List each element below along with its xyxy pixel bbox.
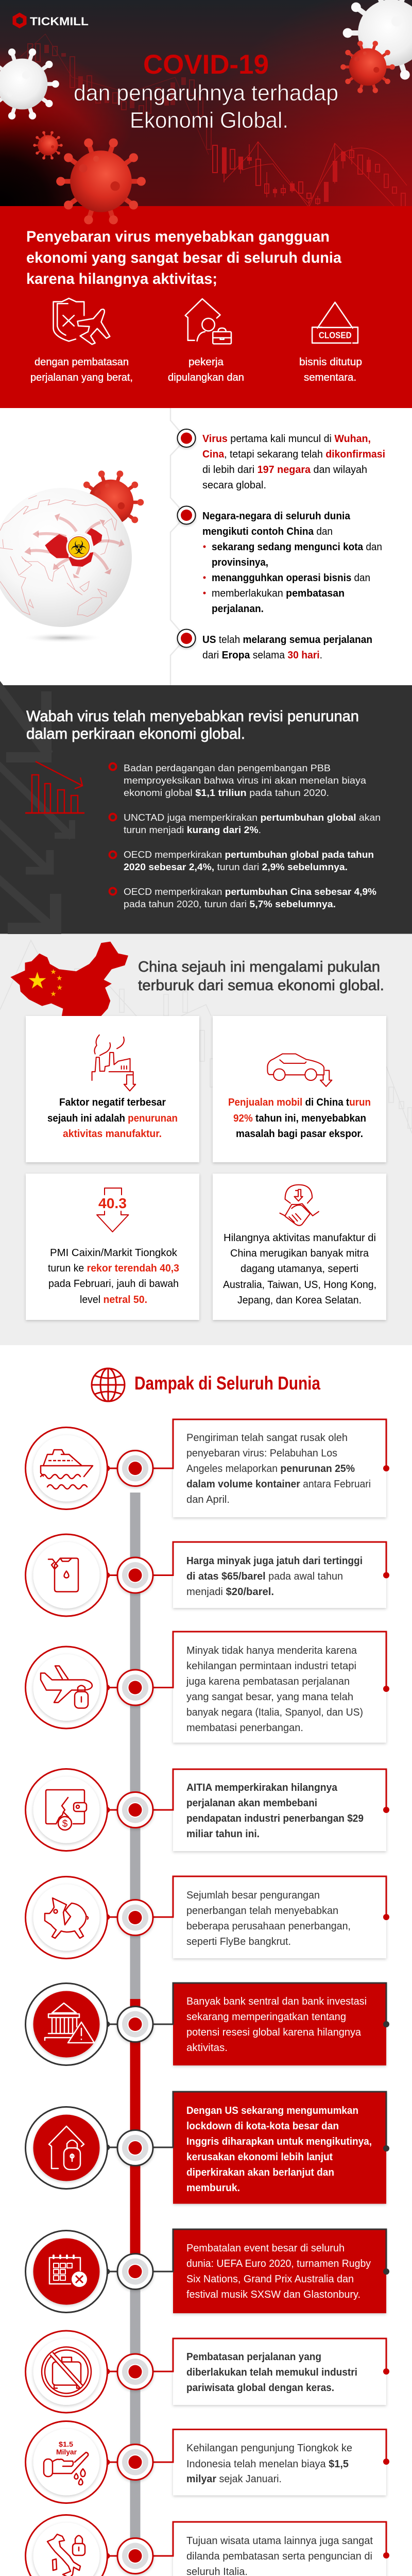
icon: car — [267, 1054, 332, 1087]
icon: hand and money drops: $1.5 — [59, 2440, 73, 2448]
text: airline revenue: miliar tahun ini. — [186, 1828, 260, 1840]
icon: plane and lock — [41, 1666, 92, 1708]
heading: forecast — [26, 708, 359, 742]
logo: Tickmill: TICKMILL — [30, 15, 89, 28]
caption: travel: dengan pembatasan — [35, 357, 129, 368]
text: countries follow China — [202, 511, 382, 615]
bullet: UN trade: memproyeksikan bahwa virus ini akan menelan biaya — [124, 775, 367, 786]
card: PMI: PMI Caixin/Markit Tiongkok — [50, 1247, 178, 1259]
text: countries follow China: menangguhkan operasi bisnis dan — [212, 572, 370, 584]
bullet: OECD China: pada tahun 2020, turun dari 5,7% sebelumnya. — [124, 899, 336, 909]
text: tourism: pariwisata global dengan keras. — [186, 2382, 334, 2394]
panel: red intro — [0, 143, 412, 408]
text: shipping: dalam volume kontainer antara Februari — [186, 1479, 371, 1490]
text: cancelled events: Pembatalan event besar di seluruh — [186, 2243, 345, 2254]
bullet marker 3 — [177, 630, 196, 647]
text: Indonesia visitors: milyar sejak Januari. — [186, 2473, 282, 2485]
timeline item: shipping — [26, 1419, 389, 1517]
icon: bank warning — [45, 2003, 94, 2043]
text: lockdown: kerusakan ekonomi lebih lanjut — [186, 2151, 333, 2163]
icon: handshake — [280, 1185, 319, 1226]
text: Italy — [186, 2535, 373, 2576]
bullet marker 2 — [177, 506, 196, 524]
text: countries follow China: memberlakukan pembatasan — [212, 588, 345, 599]
text: US ban — [202, 634, 372, 661]
text: oil price — [186, 1555, 363, 1598]
illustration: globe with virus — [0, 474, 141, 643]
text: tourism: diberlakukan telah memukul industri — [186, 2367, 357, 2378]
text: tourism — [186, 2351, 357, 2394]
heading: forecast: dalam perkiraan ekonomi global. — [26, 725, 245, 742]
icon: 40.3 down arrow — [97, 1188, 129, 1232]
title: COVID-19 — [143, 49, 269, 80]
panel: outbreak facts — [0, 408, 412, 685]
caption: travel: perjalanan yang berat, — [30, 372, 133, 383]
map: China flag — [10, 942, 128, 1016]
icon: hand and money drops — [44, 2440, 88, 2485]
text: lockdown: lockdown di kota-kota besar dan — [186, 2121, 339, 2132]
text: virus origin: Cina, tetapi sekarang telah dikonfirmasi — [202, 449, 385, 460]
panel: global impact timeline — [0, 1345, 412, 2576]
text: Indonesia visitors — [186, 2443, 352, 2485]
text: Indonesia visitors: Indonesia telah menelan biaya $1,5 — [186, 2459, 349, 2470]
text: virus origin — [202, 433, 385, 491]
text: countries follow China: provinsinya, — [212, 557, 268, 568]
heading: worldwide impact: Dampak di Seluruh Dunia — [134, 1372, 321, 1394]
icon: broken piggy bank — [45, 1898, 88, 1938]
card: car sales: 92% tahun ini, menyebabkan — [233, 1113, 366, 1124]
icon: calendar cancel — [49, 2256, 87, 2287]
text: recession warning: potensi resesi global karena hilangnya — [186, 2027, 362, 2038]
text: airline bankruptcy: Sejumlah besar pengurangan — [186, 1890, 320, 1901]
icon: closed sign: CLOSED — [319, 330, 352, 341]
chart: candlesticks right — [213, 142, 407, 216]
text: countries follow China: mengikuti contoh China dan — [202, 526, 333, 537]
caption: travel — [30, 357, 133, 383]
icon: globe — [92, 1368, 125, 1401]
text: cancelled events: festival musik SXSW dan Glastonbury. — [186, 2289, 360, 2300]
title: Ekonomi Global. — [130, 108, 288, 133]
bullet: UN trade: Badan perdagangan dan pengembangan PBB — [124, 763, 331, 773]
timeline item: tourism — [26, 2331, 389, 2413]
icon: small red virus — [35, 132, 61, 158]
icon: ship — [41, 1450, 93, 1489]
card: trade partners — [213, 1174, 386, 1320]
card: PMI — [26, 1174, 199, 1320]
text: oil price: di atas $65/barel pada awal tahun — [186, 1571, 343, 1582]
card: PMI: pada Februari, jauh di bawah — [48, 1278, 179, 1290]
text: recession warning: sekarang memperingatkan tentang — [186, 2011, 346, 2023]
timeline item: airline bankruptcy — [26, 1876, 389, 1959]
timeline item: Italy — [26, 2515, 389, 2576]
text: airline revenue — [186, 1782, 364, 1840]
bullet: UN trade — [109, 763, 367, 798]
heading: China: China sejauh ini mengalami pukulan — [138, 959, 380, 975]
icon: house lock — [49, 2126, 84, 2170]
text: countries follow China: Negara-negara di seluruh dunia — [202, 511, 351, 522]
text: airline revenue: AITIA memperkirakan hilangnya — [186, 1782, 338, 1793]
text: flight restrictions: kehilangan permintaan industri tetapi — [186, 1660, 356, 1672]
text: shipping: penyebaran virus: Pelabuhan Los — [186, 1448, 337, 1459]
icon: no luggage — [42, 2347, 91, 2397]
text: countries follow China: sekarang sedang mengunci kota dan — [212, 541, 382, 553]
icon: hand and money drops: Milyar — [56, 2448, 77, 2456]
card: trade partners: Jepang, dan Korea Selatan. — [237, 1295, 362, 1306]
text: shipping — [186, 1432, 371, 1505]
bullet: OECD global: 2020 sebesar 2,4%, turun dari 2,9% sebelumnya. — [124, 862, 348, 872]
icon: Italy lock — [47, 2534, 85, 2576]
card: trade partners: dagang utamanya, seperti — [241, 1263, 358, 1275]
icon: falling bar chart — [25, 761, 84, 813]
icon: jerry can — [48, 1558, 78, 1592]
text: virus origin: secara global. — [202, 480, 266, 491]
bullet: OECD global — [109, 850, 374, 872]
heading: virus spread: Penyebaran virus menyebabkan gangguan — [26, 228, 330, 245]
text: virus origin: di lebih dari 197 negara dan wilayah — [202, 464, 367, 476]
icon: red virus top right — [343, 43, 392, 91]
icon: broken wallet — [46, 1790, 87, 1830]
text: lockdown: memburuk. — [186, 2182, 240, 2194]
card: car sales: masalah bagi pasar ekspor. — [236, 1128, 363, 1140]
text: cancelled events — [186, 2243, 371, 2300]
text: airline revenue: perjalanan akan membebani — [186, 1798, 317, 1809]
card: car sales: Penjualan mobil di China turun — [228, 1097, 371, 1108]
bullet: UNCTAD: turun menjadi kurang dari 2% . — [124, 825, 261, 835]
card: manufacturing: sejauh ini adalah penurunan — [47, 1113, 178, 1124]
bullet: UNCTAD: UNCTAD juga memperkirakan pertumbuhan global akan — [124, 812, 381, 823]
text: airline bankruptcy: beberapa perusahaan penerbangan, — [186, 1921, 351, 1932]
bullet: OECD global: OECD memperkirakan pertumbuhan global pada tahun — [124, 850, 374, 860]
card: car sales — [213, 1016, 386, 1162]
heading: forecast: Wabah virus telah menyebabkan revisi penurunan — [26, 708, 359, 725]
text: recession warning: aktivitas. — [186, 2042, 228, 2054]
text: cancelled events: Six Nations, Grand Prix Australia dan — [186, 2274, 354, 2285]
caption: workers: pekerja — [188, 357, 224, 368]
text: shipping: Angeles melaporkan penurunan 25% — [186, 1463, 355, 1475]
text: flight restrictions — [186, 1645, 363, 1734]
icon: white virus top right — [348, 0, 412, 75]
timeline item: airline revenue — [26, 1769, 389, 1851]
text: lockdown: diperkirakan akan berlanjut dan — [186, 2167, 334, 2178]
text: airline revenue: pendapatan industri penerbangan $29 — [186, 1813, 364, 1824]
text: airline bankruptcy — [186, 1890, 351, 1947]
text: lockdown: Dengan US sekarang mengumumkan — [186, 2105, 358, 2116]
timeline item: recession warning — [26, 1983, 389, 2065]
text: shipping: dan April. — [186, 1494, 230, 1505]
panel: China impact — [0, 934, 412, 1345]
title: dan pengaruhnya terhadap — [74, 80, 338, 106]
text: countries follow China: perjalanan. — [212, 603, 264, 615]
icon: closed sign — [312, 302, 358, 343]
caption: business — [299, 357, 362, 383]
card: PMI: turun ke rekor terendah 40,3 — [48, 1263, 179, 1274]
timeline item: cancelled events — [26, 2229, 389, 2313]
icon: 40.3 down arrow: 40.3 — [98, 1195, 127, 1211]
card: trade partners: Australia, Taiwan, US, Hong Kong, — [223, 1279, 376, 1291]
illustration: globe with virus: ☣ — [71, 537, 87, 558]
heading: China — [138, 959, 384, 994]
timeline item: flight restrictions — [26, 1632, 389, 1742]
text: lockdown — [186, 2105, 372, 2194]
logo: Tickmill — [14, 14, 89, 28]
card: PMI: level netral 50. — [80, 1294, 147, 1306]
caption: workers — [168, 357, 244, 383]
title — [74, 49, 338, 133]
text: oil price: menjadi $20/barel. — [186, 1586, 274, 1598]
text: tourism: Pembatasan perjalanan yang — [186, 2351, 321, 2363]
text: airline bankruptcy: penerbangan telah menyebabkan — [186, 1905, 338, 1917]
card: manufacturing: aktivitas manufaktur. — [63, 1128, 162, 1140]
text: flight restrictions: membatasi penerbangan. — [186, 1722, 303, 1734]
caption: workers: dipulangkan dan — [168, 372, 244, 383]
text: flight restrictions: juga karena pembatasan perjalanan — [186, 1676, 350, 1687]
heading: virus spread: karena hilangnya aktivitas; — [26, 270, 217, 287]
icon: white virus left — [0, 52, 56, 116]
card: trade partners: Hilangnya aktivitas manufaktur di — [224, 1232, 376, 1244]
caption: business: sementara. — [304, 372, 356, 383]
panel: forecast revisions — [0, 683, 412, 934]
text: recession warning: Banyak bank sentral dan bank investasi — [186, 1996, 367, 2007]
bullet: OECD China: OECD memperkirakan pertumbuhan Cina sebesar 4,9% — [124, 887, 376, 897]
text: US ban: dari Eropa selama 30 hari. — [202, 650, 322, 661]
heading: China: terburuk dari semua ekonomi global. — [138, 977, 384, 994]
text: cancelled events: dunia: UEFA Euro 2020, turnamen Rugby — [186, 2258, 371, 2269]
card: manufacturing: Faktor negatif terbesar — [59, 1097, 166, 1108]
bullet: OECD China — [109, 887, 376, 909]
bullet: UN trade: ekonomi global $1,1 triliun pada tahun 2020. — [124, 788, 329, 798]
text: lockdown: Inggris diharapkan untuk mengikutinya, — [186, 2136, 372, 2147]
heading: virus spread: ekonomi yang sangat besar di seluruh dunia — [26, 249, 341, 266]
text: virus origin: Virus pertama kali muncul di Wuhan, — [202, 433, 371, 445]
bullet: UNCTAD — [109, 812, 381, 835]
panel: header hero — [0, 0, 412, 216]
text: US ban: US telah melarang semua perjalanan — [202, 634, 372, 646]
text: Indonesia visitors: Kehilangan pengunjung Tiongkok ke — [186, 2443, 352, 2454]
icon: big red virus — [61, 143, 141, 220]
icon: broken wallet: $ — [62, 1819, 68, 1829]
text: shipping: Pengiriman telah sangat rusak oleh — [186, 1432, 348, 1444]
text: flight restrictions: banyak negara (Italia, Spanyol, dan US) — [186, 1707, 363, 1718]
timeline spine — [130, 1493, 140, 2556]
card: trade partners: China merugikan banyak mitra — [230, 1248, 369, 1259]
timeline item: lockdown — [26, 2092, 389, 2204]
icon: factory — [92, 1035, 135, 1091]
timeline item: oil price — [26, 1534, 389, 1616]
text: Italy: dilanda pembatasan serta penguncian di — [186, 2551, 372, 2562]
text: Italy: Tujuan wisata utama lainnya juga sangat — [186, 2535, 373, 2547]
text: flight restrictions: Minyak tidak hanya menderita karena — [186, 1645, 357, 1656]
text: recession warning — [186, 1996, 367, 2054]
bullet marker 1 — [177, 429, 196, 447]
text: oil price: Harga minyak juga jatuh dari tertinggi — [186, 1555, 363, 1567]
chart: faint candlesticks left — [21, 34, 211, 155]
icon: travel restriction — [54, 298, 110, 344]
heading: virus spread — [26, 228, 341, 287]
text: airline bankruptcy: seperti FlyBe bangkrut. — [186, 1936, 291, 1947]
caption: business: bisnis ditutup — [299, 357, 362, 368]
timeline item: Indonesia visitors — [26, 2421, 389, 2503]
card: manufacturing — [26, 1016, 199, 1162]
icon: workers sent home — [185, 299, 231, 344]
text: flight restrictions: yang sangat besar, yang mana telah — [186, 1691, 353, 1703]
